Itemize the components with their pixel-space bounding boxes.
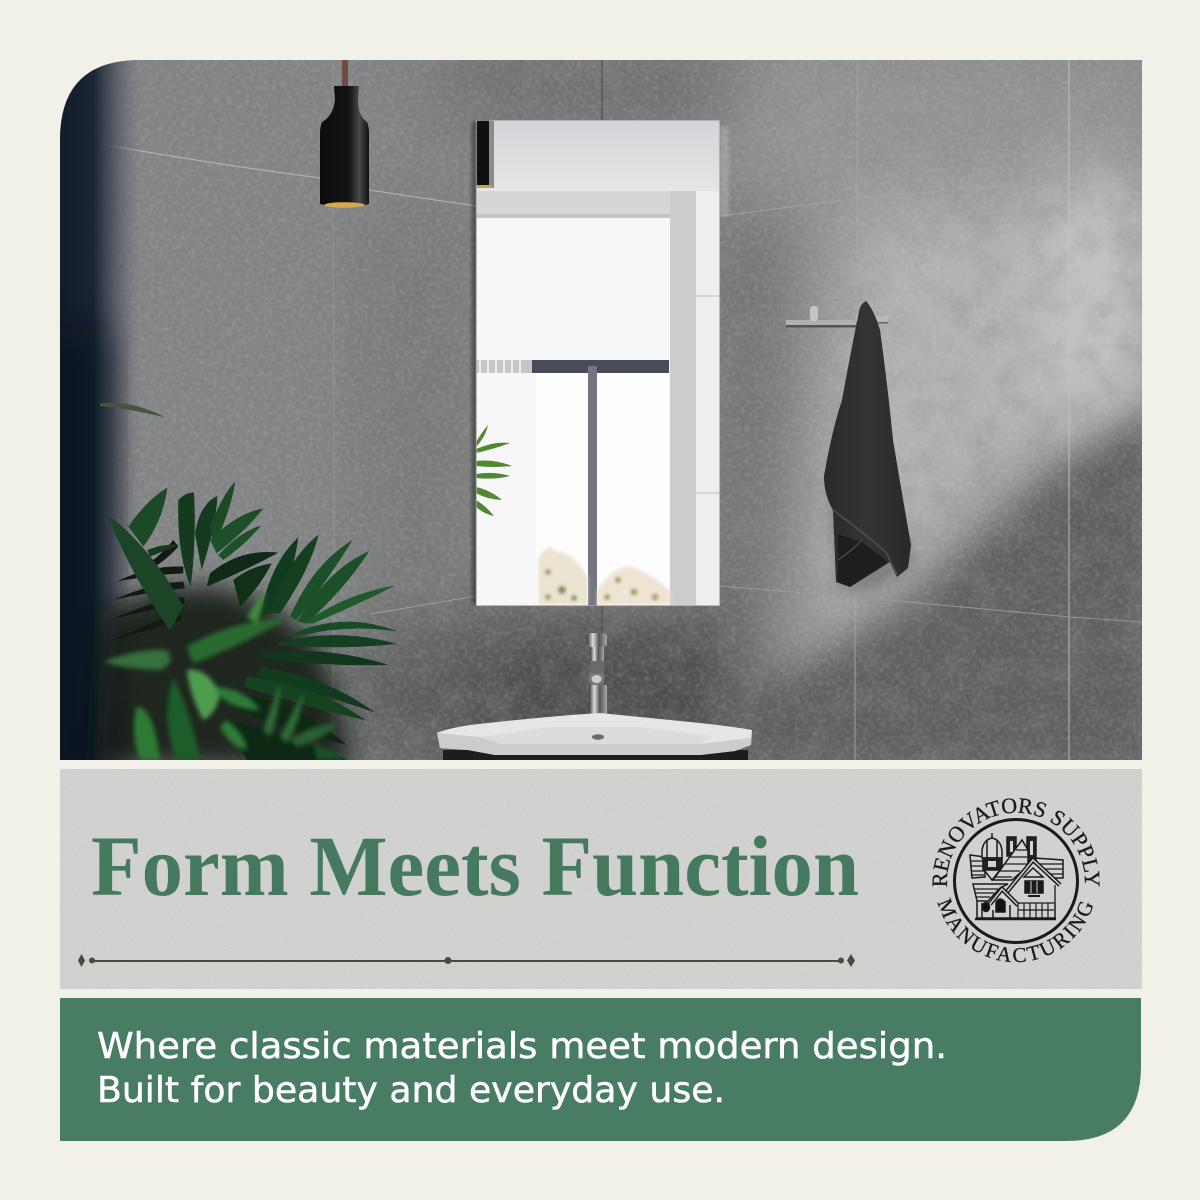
concrete wall [60, 40, 1160, 780]
pendant lamp [320, 60, 369, 208]
title panel [60, 769, 1142, 989]
corner sink with faucet [437, 633, 752, 760]
lattice fence [1018, 903, 1054, 918]
left dark shadow band [60, 60, 136, 760]
main gable [1006, 860, 1060, 893]
heading: Form Meets Function [91, 818, 859, 914]
tile joints [100, 60, 1142, 760]
hanging towel [824, 301, 915, 592]
porch gable [977, 901, 1055, 918]
left and right roof bands [970, 855, 985, 878]
upper stray frond [100, 403, 166, 418]
thin left leaflets [110, 540, 185, 642]
ornamental divider [78, 954, 855, 967]
lower left roof [973, 884, 1008, 901]
upper frond [107, 482, 278, 630]
potted palm plant [93, 403, 398, 767]
green tagline panel [60, 998, 1141, 1141]
tagline line one: Where classic materials meet modern design. [97, 1026, 947, 1067]
flowers in reflection [538, 548, 671, 605]
blurred foreground leaves [103, 590, 347, 760]
towel hook rail [786, 306, 888, 328]
photo: bathroom scene [40, 40, 1160, 790]
logo: Renovators Supply Manufacturing [932, 798, 1100, 962]
logo lettering top: RENOVATORS SUPPLY [932, 798, 1100, 887]
logo house illustration [970, 833, 1063, 919]
shaded plant mass [93, 587, 353, 767]
lower dark leaves [227, 693, 347, 760]
right frond [233, 534, 398, 721]
logo lettering bottom: MANUFACTURING [937, 897, 1093, 962]
main roof [993, 840, 1028, 880]
mirror side shading [472, 122, 476, 604]
wall mirror [476, 120, 720, 606]
dome tower [982, 838, 1002, 858]
tagline line two: Built for beauty and everyday use. [97, 1070, 725, 1111]
fern reflection [476, 425, 512, 516]
chimneys [1007, 837, 1016, 856]
